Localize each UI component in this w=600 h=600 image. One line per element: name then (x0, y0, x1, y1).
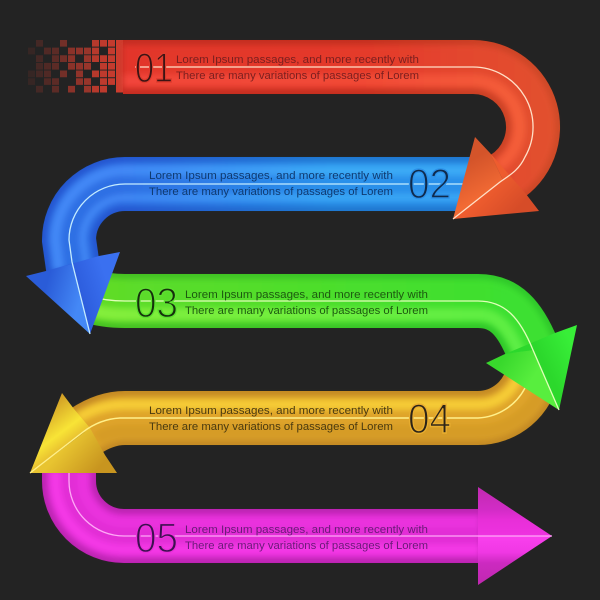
arrow 02: blue (26, 160, 480, 334)
blue band (56, 170, 480, 270)
number 04: 04 (408, 395, 451, 442)
arrow 03: green (90, 279, 577, 410)
text block 03: There are many variations of passages of Lorem (185, 305, 428, 317)
blue arrow head (26, 252, 120, 334)
number 01: 01 (135, 44, 173, 91)
text block 01: There are many variations of passages of Lorem (176, 70, 419, 82)
red highlight line (135, 67, 533, 219)
text block 04: There are many variations of passages of Lorem (149, 421, 393, 433)
arrow 01: red (28, 40, 539, 219)
magenta highlight line (69, 470, 552, 536)
text block 02 (149, 170, 393, 198)
number 02: 02 (408, 160, 451, 207)
text block 03 (185, 289, 428, 317)
blue highlight line (69, 184, 480, 334)
text block 05 (185, 524, 428, 552)
orange highlight line (30, 388, 525, 473)
text block 03: Lorem Ipsum passages, and more recently with (185, 289, 428, 301)
red band (123, 67, 533, 178)
text block 02: Lorem Ipsum passages, and more recently with (149, 170, 393, 182)
magenta arrow head (478, 487, 552, 585)
green band (90, 296, 533, 356)
text block 05: Lorem Ipsum passages, and more recently with (185, 524, 428, 536)
pixel dissolve tail (28, 40, 123, 93)
text block 05: There are many variations of passages of Lorem (185, 540, 428, 552)
green arrow head (486, 325, 577, 410)
text block 04: Lorem Ipsum passages, and more recently with (149, 405, 393, 417)
red arrow head (453, 137, 539, 219)
arrow 04: orange (30, 369, 546, 473)
magenta band (56, 470, 480, 550)
text block 04 (149, 405, 393, 433)
orange band (78, 369, 546, 439)
number 05: 05 (135, 514, 178, 561)
text block 01: Lorem Ipsum passages, and more recently with (176, 54, 419, 66)
text block 01 (176, 54, 419, 82)
orange arrow head (30, 393, 117, 473)
arrow 05: magenta (56, 470, 552, 585)
text block 02: There are many variations of passages of Lorem (149, 186, 393, 198)
number 03: 03 (135, 279, 178, 326)
green highlight line (90, 296, 559, 410)
